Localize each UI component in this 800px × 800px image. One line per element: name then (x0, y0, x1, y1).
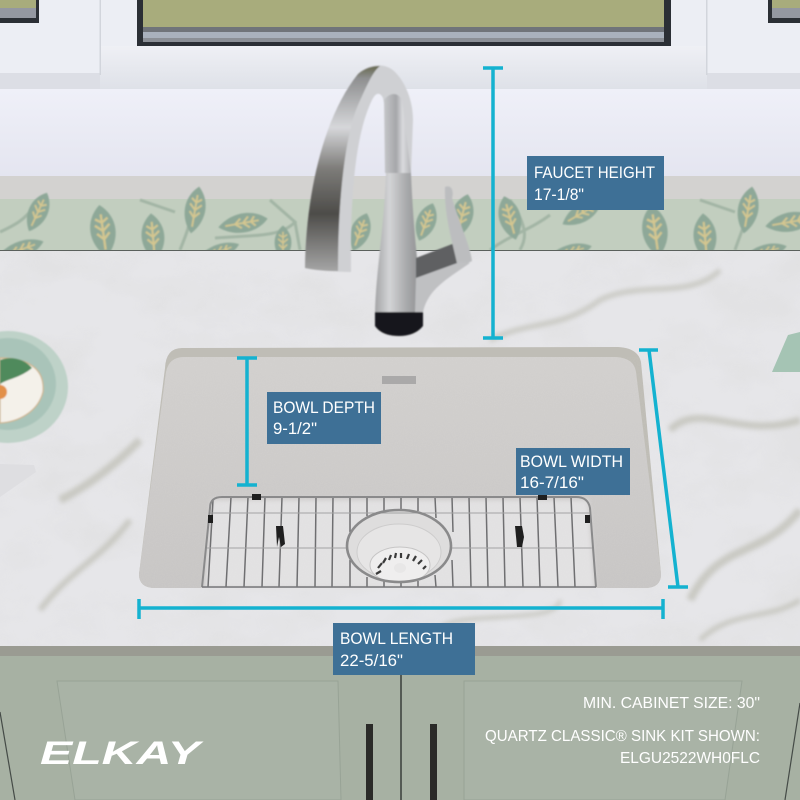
faucet height label: FAUCET HEIGHT (534, 164, 655, 182)
drain strainer (347, 510, 451, 583)
window: centre pane (137, 0, 671, 46)
bowl depth label (267, 392, 381, 444)
marble block on counter (0, 464, 36, 497)
left door inset panel (57, 681, 341, 800)
bowl length label (333, 623, 475, 675)
faucet height label: 17-1/8" (534, 186, 584, 204)
text: sink kit shown: ELGU2522WH0FLC (620, 750, 760, 767)
faucet neck sweep (415, 262, 470, 312)
patterned leaf backsplash (0, 185, 800, 266)
faucet lower body (375, 173, 423, 313)
logo: Elkay: ELKAY (40, 735, 204, 771)
faucet spout arch (305, 65, 413, 272)
bowl depth line (237, 357, 257, 485)
bowl length label: BOWL LENGTH (340, 630, 453, 648)
text: sink kit shown: QUARTZ CLASSIC® SINK KIT SHOWN: (485, 728, 760, 745)
dimension: bowl width (516, 350, 688, 587)
sink floor glow (205, 500, 595, 588)
faucet handle arm (416, 241, 462, 282)
bowl width label: BOWL WIDTH (520, 453, 623, 471)
bottom grid (202, 497, 596, 587)
marble countertop (0, 251, 800, 648)
cabinet base (0, 656, 800, 800)
faucet stem (384, 94, 411, 173)
cabinet handle right (430, 724, 437, 800)
faucet spout reflection band (305, 66, 380, 271)
window sill and ledge (0, 89, 800, 200)
window wall frame (0, 0, 800, 92)
bowl depth label: BOWL DEPTH (273, 399, 375, 417)
bowl depth label: 9-1/2" (273, 420, 317, 438)
cabinet handle left (366, 724, 373, 800)
text: minimum cabinet size: MIN. CABINET SIZE: 30" (583, 695, 760, 712)
counter edge (0, 646, 800, 656)
sink brand plate (382, 376, 416, 384)
dimension: bowl depth (237, 357, 381, 485)
faucet height line (483, 67, 503, 339)
faucet height label (527, 156, 664, 210)
faucet handle lever (445, 186, 472, 268)
bowl width label: 16-7/16" (520, 474, 584, 492)
speckle texture (139, 357, 661, 588)
faucet (305, 65, 472, 336)
green utensil at right edge (772, 332, 800, 372)
text: sink kit shown (485, 728, 760, 767)
bowl length line (139, 599, 663, 619)
dimension: bowl length (139, 599, 663, 675)
dimension: faucet height (483, 67, 664, 339)
bowl length label: 22-5/16" (340, 652, 403, 670)
bowl width line (639, 350, 688, 587)
sink basin wall (139, 357, 661, 588)
plate with toast (0, 331, 68, 443)
sink rim (139, 347, 661, 588)
grid rubber bumpers (208, 494, 590, 547)
window: right pane (768, 0, 800, 23)
window: left pane (0, 0, 39, 23)
sink bowl (139, 347, 661, 588)
right door inset panel (464, 681, 742, 800)
faucet black base (375, 312, 423, 336)
bowl width label (516, 448, 630, 495)
